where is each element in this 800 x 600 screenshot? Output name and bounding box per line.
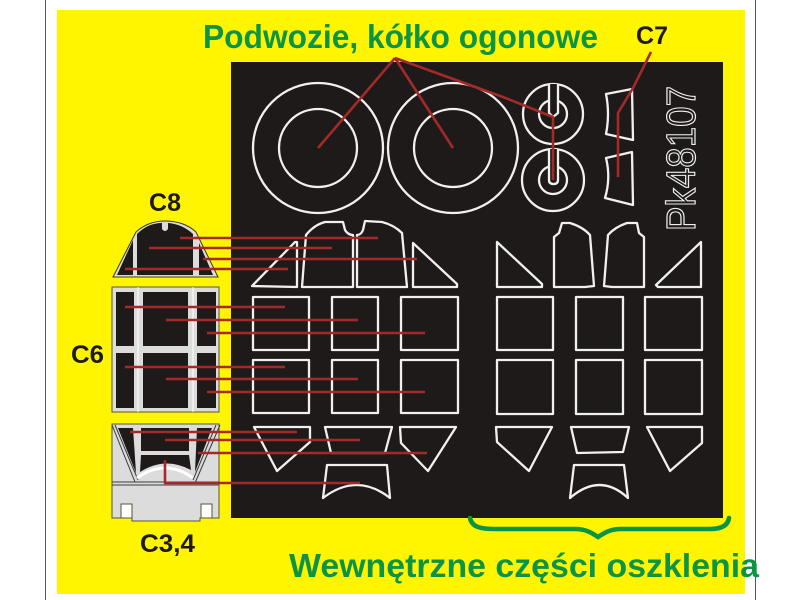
- red leader lines: wheels: [318, 58, 553, 180]
- red leader lines: C6: [125, 307, 425, 392]
- black mask sheet: [231, 62, 723, 518]
- heading: landing gear: Podwozie, kółko ogonowe: [203, 18, 598, 55]
- C8 canopy diagram: [113, 221, 218, 277]
- red leader lines: C8: [125, 238, 417, 269]
- product code: Pk48107: [658, 86, 704, 231]
- label: C8: C8: [149, 189, 181, 217]
- heading: inner glazing parts: Wewnętrzne części oszklenia: [289, 547, 760, 584]
- wheel masks: [253, 83, 584, 213]
- red leader lines: C3,4: [130, 432, 427, 483]
- label: C7: C7: [636, 22, 668, 50]
- right mask set: [496, 223, 702, 498]
- C3,4 windscreen diagram: [112, 424, 220, 521]
- green curly brace: [470, 518, 729, 537]
- label: C6: C6: [71, 341, 104, 369]
- label: C3,4: C3,4: [140, 530, 195, 558]
- C7 masks: [605, 89, 633, 205]
- left mask set: [252, 221, 458, 498]
- red leader line: C7: [618, 52, 651, 177]
- C6 window frame diagram: [112, 287, 219, 412]
